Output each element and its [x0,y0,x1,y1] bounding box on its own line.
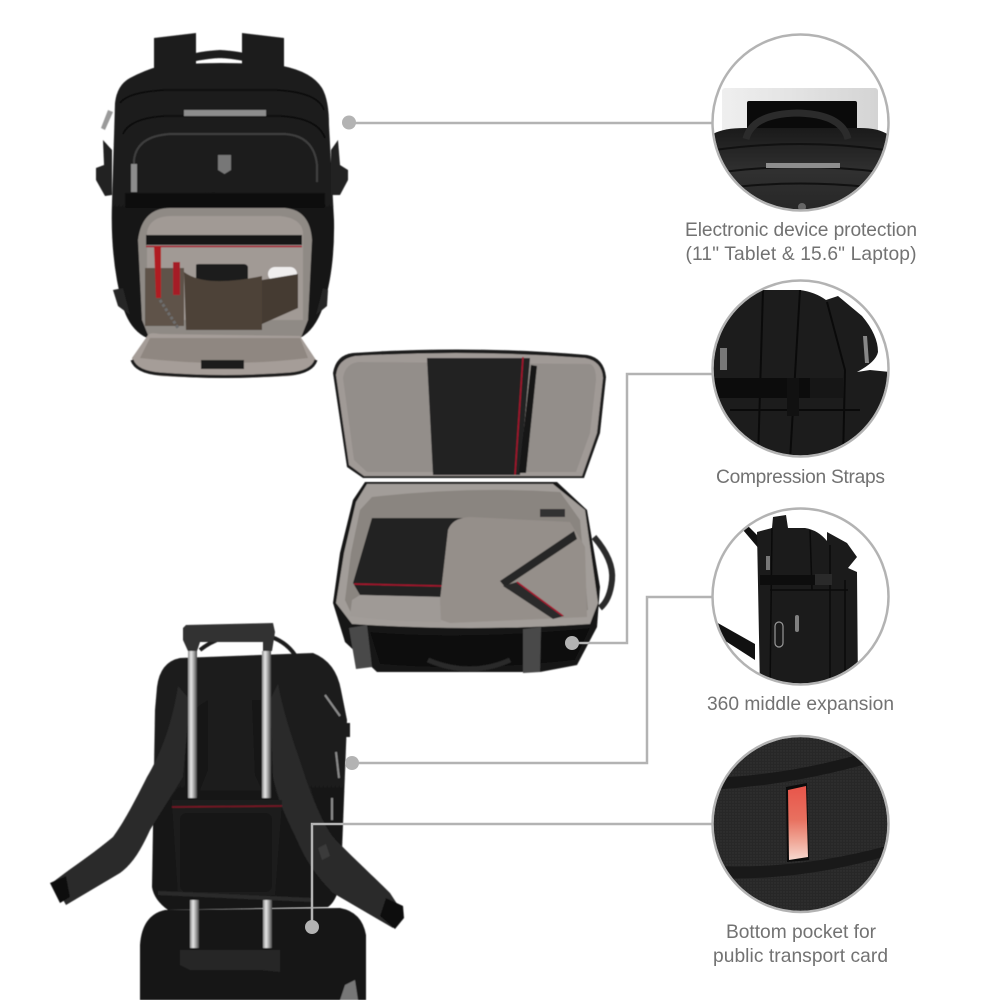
flap edge [132,360,316,376]
slot shadow [786,783,809,862]
caption: device protection: (11" Tablet & 15.6" Laptop) [686,244,916,265]
compression strap [712,378,812,398]
flap inner shade [140,338,308,363]
caption: device protection [685,220,917,265]
lower floor diamond lining [350,595,441,622]
small zip [766,556,770,570]
zip pull [795,615,799,632]
right side tab [320,723,350,737]
leader line: device protection [342,116,713,130]
red piping [146,246,302,248]
sleeve panel [180,813,272,892]
fold-out flap [132,333,316,378]
brown pocket [184,272,262,330]
case base outer [333,482,600,672]
strap adjuster [318,844,330,860]
caption: bottom pocket [713,922,888,967]
lid red piping [515,357,523,475]
front pocket [134,134,317,192]
laptop [722,88,878,130]
suitcase zip [340,980,358,1000]
zip tab [540,509,565,517]
detail circle: middle expansion [712,508,888,690]
top zipper pull [184,110,266,116]
front pocket piping [134,134,317,182]
lower front panel [370,628,590,667]
strap loop [787,398,799,416]
side handle [594,537,612,608]
left shoulder strap [53,686,190,905]
side buckles [96,140,348,196]
lower straps [716,622,755,660]
black sheet [353,518,463,597]
keys [160,300,178,328]
brown side pocket [262,274,298,324]
luggage sleeve [172,800,282,895]
body seams [120,90,325,138]
strap red edge [517,582,563,616]
red pen [173,262,180,295]
mesh pocket shadow [145,268,184,326]
handle base bracket [180,950,280,972]
top carry handle [162,54,278,81]
backpack body [152,653,347,910]
bag side [705,290,890,460]
red key strap [154,246,161,298]
upper attachment arc [200,634,295,655]
base rim [336,484,598,628]
telescopic rod right lower [263,900,272,948]
lower side clips [113,288,328,315]
right buckle [380,898,404,929]
red-trim strap two [503,582,564,619]
base floor [345,490,588,618]
leader line: compression straps [565,374,713,650]
detail circle: compression straps [705,280,890,460]
front buckle right [523,627,541,673]
open travel case view [333,349,612,673]
backpack: rear view mounted on suitcase [50,623,404,1000]
sheet red piping [354,584,442,586]
pocket lining back [147,216,303,320]
earbuds case [268,267,297,281]
left zip pull [101,110,113,130]
logo shield [218,155,231,174]
caption: compression straps: Compression Straps [716,467,885,488]
front buckle left [349,625,372,669]
bag top [714,128,886,210]
black zip band [146,235,302,245]
suitcase body [140,908,366,1000]
side zipper pull [131,164,137,192]
caption: bottom pocket: public transport card [713,946,888,967]
phone [196,264,248,290]
backpack body [112,63,334,338]
panel seams [770,528,848,690]
case lid lining [336,353,603,476]
buckle [810,378,812,398]
panel seams [730,290,860,460]
left buckle [50,876,70,903]
handle [746,113,848,139]
upper straps [744,526,758,547]
case lid outer [333,349,606,478]
flap label [201,360,244,369]
telescopic rod left upper [188,651,197,798]
side view body [757,515,858,690]
sleeve red piping [172,806,282,807]
red-trim strap one [500,531,577,587]
detail circle: bottom card pocket [710,735,892,915]
telescopic rod right upper [262,651,271,798]
leader line: bottom pocket [305,824,713,934]
transit card [788,786,808,860]
lid zipper [519,365,537,473]
lower body shadow [125,193,325,208]
caption: bottom pocket: Bottom pocket for [726,922,877,943]
zip pull left [720,348,727,370]
back padding centre [195,690,262,790]
open pocket interior [138,208,312,340]
lid inner [343,362,596,472]
leader line: middle expansion [345,597,713,770]
vent pill [775,622,783,647]
bottom strap [158,893,312,900]
lid black sleeve [427,358,530,475]
bottom handle [428,660,510,669]
lower seam band [725,846,884,878]
upper seam band [721,756,864,789]
logo [798,203,806,210]
zip pull right [863,336,869,363]
caption: middle expansion: 360 middle expansion [707,694,894,715]
back padding sides [185,700,280,790]
backpack: front view with open organizer pocket [96,33,348,378]
tablet [747,101,857,131]
bag seams [715,144,885,187]
shoulder strap tops [154,33,284,68]
telescopic rod left lower [190,900,199,948]
buckle [815,574,832,585]
side zippers [325,695,340,820]
detail circle: laptop and tablet sleeve [710,34,890,215]
gray flap [440,517,587,623]
luggage handle grip [183,623,275,651]
caption: device protection: Electronic device protection [685,220,917,241]
horizontal strap [760,575,815,585]
right shoulder strap [270,684,403,928]
fabric [710,735,892,915]
zipper [766,163,840,168]
